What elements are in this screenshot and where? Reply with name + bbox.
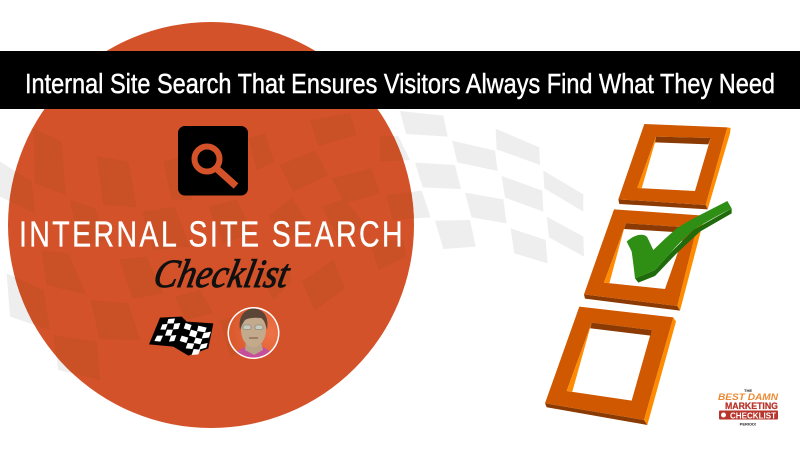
hair	[240, 308, 267, 330]
neck	[245, 342, 263, 355]
heading: internal site search: INTERNAL SITE SEARCH	[19, 214, 405, 254]
logo: best damn marketing checklist: MARKETING	[725, 401, 778, 412]
script heading: checklist: Checklist	[150, 251, 295, 296]
icon: magnifying glass	[178, 126, 248, 196]
orange circle	[8, 22, 414, 428]
mouth	[249, 337, 258, 339]
icon: checkered flag	[149, 317, 213, 356]
logo: best damn marketing checklist: CHECKLIST	[730, 412, 776, 420]
icon: green check mark	[627, 201, 732, 283]
logo: best damn marketing checklist: THE	[744, 388, 752, 393]
flag pattern inside circle	[10, 114, 414, 380]
glasses	[243, 325, 263, 330]
portrait photo	[228, 307, 280, 359]
face	[241, 318, 266, 347]
shirt	[237, 347, 270, 358]
title banner	[0, 51, 800, 109]
logo: best damn marketing checklist: PERIOD!	[740, 422, 756, 426]
logo: best damn marketing checklist: BEST DAMN	[718, 392, 779, 403]
logo: best damn marketing checklist	[718, 388, 779, 426]
checkbox: top	[618, 124, 731, 209]
background checkered flag pattern	[0, 111, 584, 380]
checkbox: bottom	[545, 307, 676, 425]
checkbox: middle	[584, 209, 703, 311]
